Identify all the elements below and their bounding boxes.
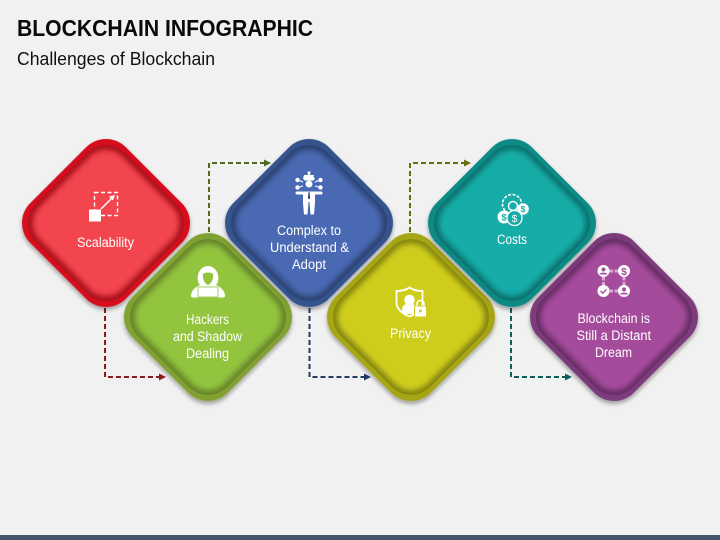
- icon: gear and coins: $: [512, 213, 518, 225]
- arrow: complex to privacy: [310, 308, 371, 380]
- icon: scaling square: [89, 192, 118, 222]
- label: hackers and shadow dealing: and Shadow: [173, 329, 242, 344]
- label: blockchain is still a distant dream: Dream: [595, 345, 632, 360]
- label: scalability: Scalability: [77, 235, 134, 250]
- icon: gear and coins: [498, 194, 529, 226]
- panel: blockchain is still a distant dream: [518, 221, 710, 413]
- footer bar: [0, 535, 720, 540]
- arrow: privacy to costs: [410, 160, 471, 232]
- arrow: scalability to hackers: [105, 308, 166, 380]
- label: hackers and shadow dealing: Dealing: [186, 346, 229, 361]
- panel: hackers and shadow dealing: [112, 221, 304, 413]
- icon: hooded hacker: [191, 266, 225, 298]
- label: complex to understand and adopt: Adopt: [292, 257, 326, 272]
- label: complex to understand and adopt: Complex to: [277, 223, 341, 238]
- icon: chain network: [598, 265, 630, 297]
- icon: person with puzzle and ideas: [295, 172, 323, 214]
- panel: complex to understand and adopt: [213, 127, 405, 319]
- label: privacy: Privacy: [390, 326, 431, 341]
- label: hackers and shadow dealing: Hackers: [186, 312, 229, 327]
- arrow: costs to blockchain dream: [511, 308, 572, 380]
- label: complex to understand and adopt: [270, 223, 349, 272]
- panel: privacy: [315, 221, 507, 413]
- title: BLOCKCHAIN INFOGRAPHIC: [17, 15, 313, 41]
- label: costs: Costs: [497, 232, 527, 247]
- subtitle: Challenges of Blockchain: [17, 49, 215, 69]
- icon: gear and coins: $: [521, 204, 526, 214]
- label: blockchain is still a distant dream: Blockchain is: [578, 311, 650, 326]
- label: blockchain is still a distant dream: Still a Distant: [576, 328, 651, 343]
- label: hackers and shadow dealing: [173, 312, 242, 361]
- icon: shield with person and padlock: [396, 288, 426, 317]
- panel: scalability: [10, 127, 202, 319]
- panel: costs: [416, 127, 608, 319]
- label: complex to understand and adopt: Understand &: [270, 240, 349, 255]
- label: blockchain is still a distant dream: [576, 311, 651, 360]
- icon: gear and coins: $: [501, 212, 507, 224]
- arrow: hackers to complex: [209, 160, 271, 232]
- icon: chain network: $: [621, 266, 627, 278]
